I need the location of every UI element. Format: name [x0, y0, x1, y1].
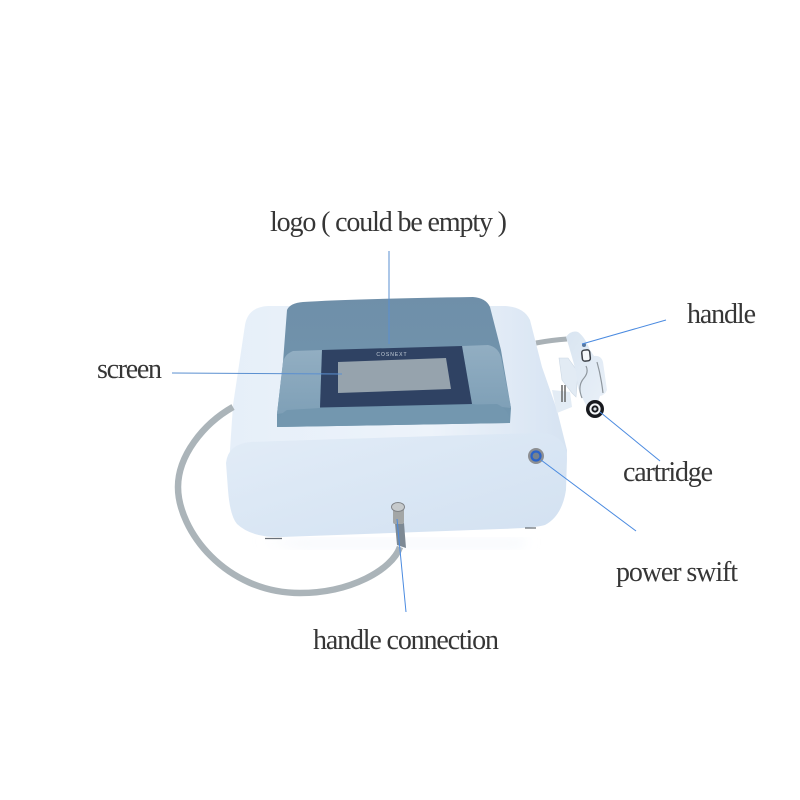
lid base and top panel [277, 297, 511, 427]
cable [178, 407, 400, 593]
leader: handle [582, 320, 666, 344]
handpiece display [581, 350, 591, 361]
handpiece [559, 332, 607, 418]
body upper shell [228, 306, 567, 480]
lid front lip [277, 404, 510, 427]
label: power switch: power swift [616, 557, 738, 588]
handpiece clip [559, 358, 578, 397]
connector metal [393, 508, 404, 524]
cartridge tip [586, 400, 604, 418]
device shadow [260, 541, 530, 546]
machine body [226, 297, 567, 538]
leader: logo [388, 251, 390, 344]
label: cartridge: cartridge [623, 457, 713, 488]
screen display [338, 358, 451, 393]
label: handle connection: handle connection [313, 625, 499, 656]
power switch [528, 448, 544, 464]
handle cable rear [536, 339, 567, 343]
leader: screen [172, 373, 342, 374]
handpiece body [566, 332, 607, 405]
rear handle bracket [552, 385, 572, 413]
screen bezel [320, 346, 472, 408]
handpiece contour lines [580, 362, 603, 398]
connector cap [392, 502, 404, 512]
lid [277, 297, 511, 427]
brand logo: COSNEXT [376, 352, 408, 358]
handpiece indicator [582, 343, 586, 347]
leader lines [172, 251, 666, 612]
leader: power switch [541, 460, 636, 531]
lid band right side [462, 345, 511, 408]
label: handle: handle [687, 299, 756, 330]
feet [265, 528, 536, 538]
leader: cartridge [600, 412, 660, 461]
cable and connector [178, 407, 406, 593]
lid band left side [277, 350, 322, 414]
body front face [226, 433, 567, 537]
label: logo: logo ( could be empty ) [270, 207, 507, 238]
leader: handle connection [397, 519, 406, 612]
connector sleeve [395, 523, 406, 548]
label: screen: screen [97, 354, 162, 385]
